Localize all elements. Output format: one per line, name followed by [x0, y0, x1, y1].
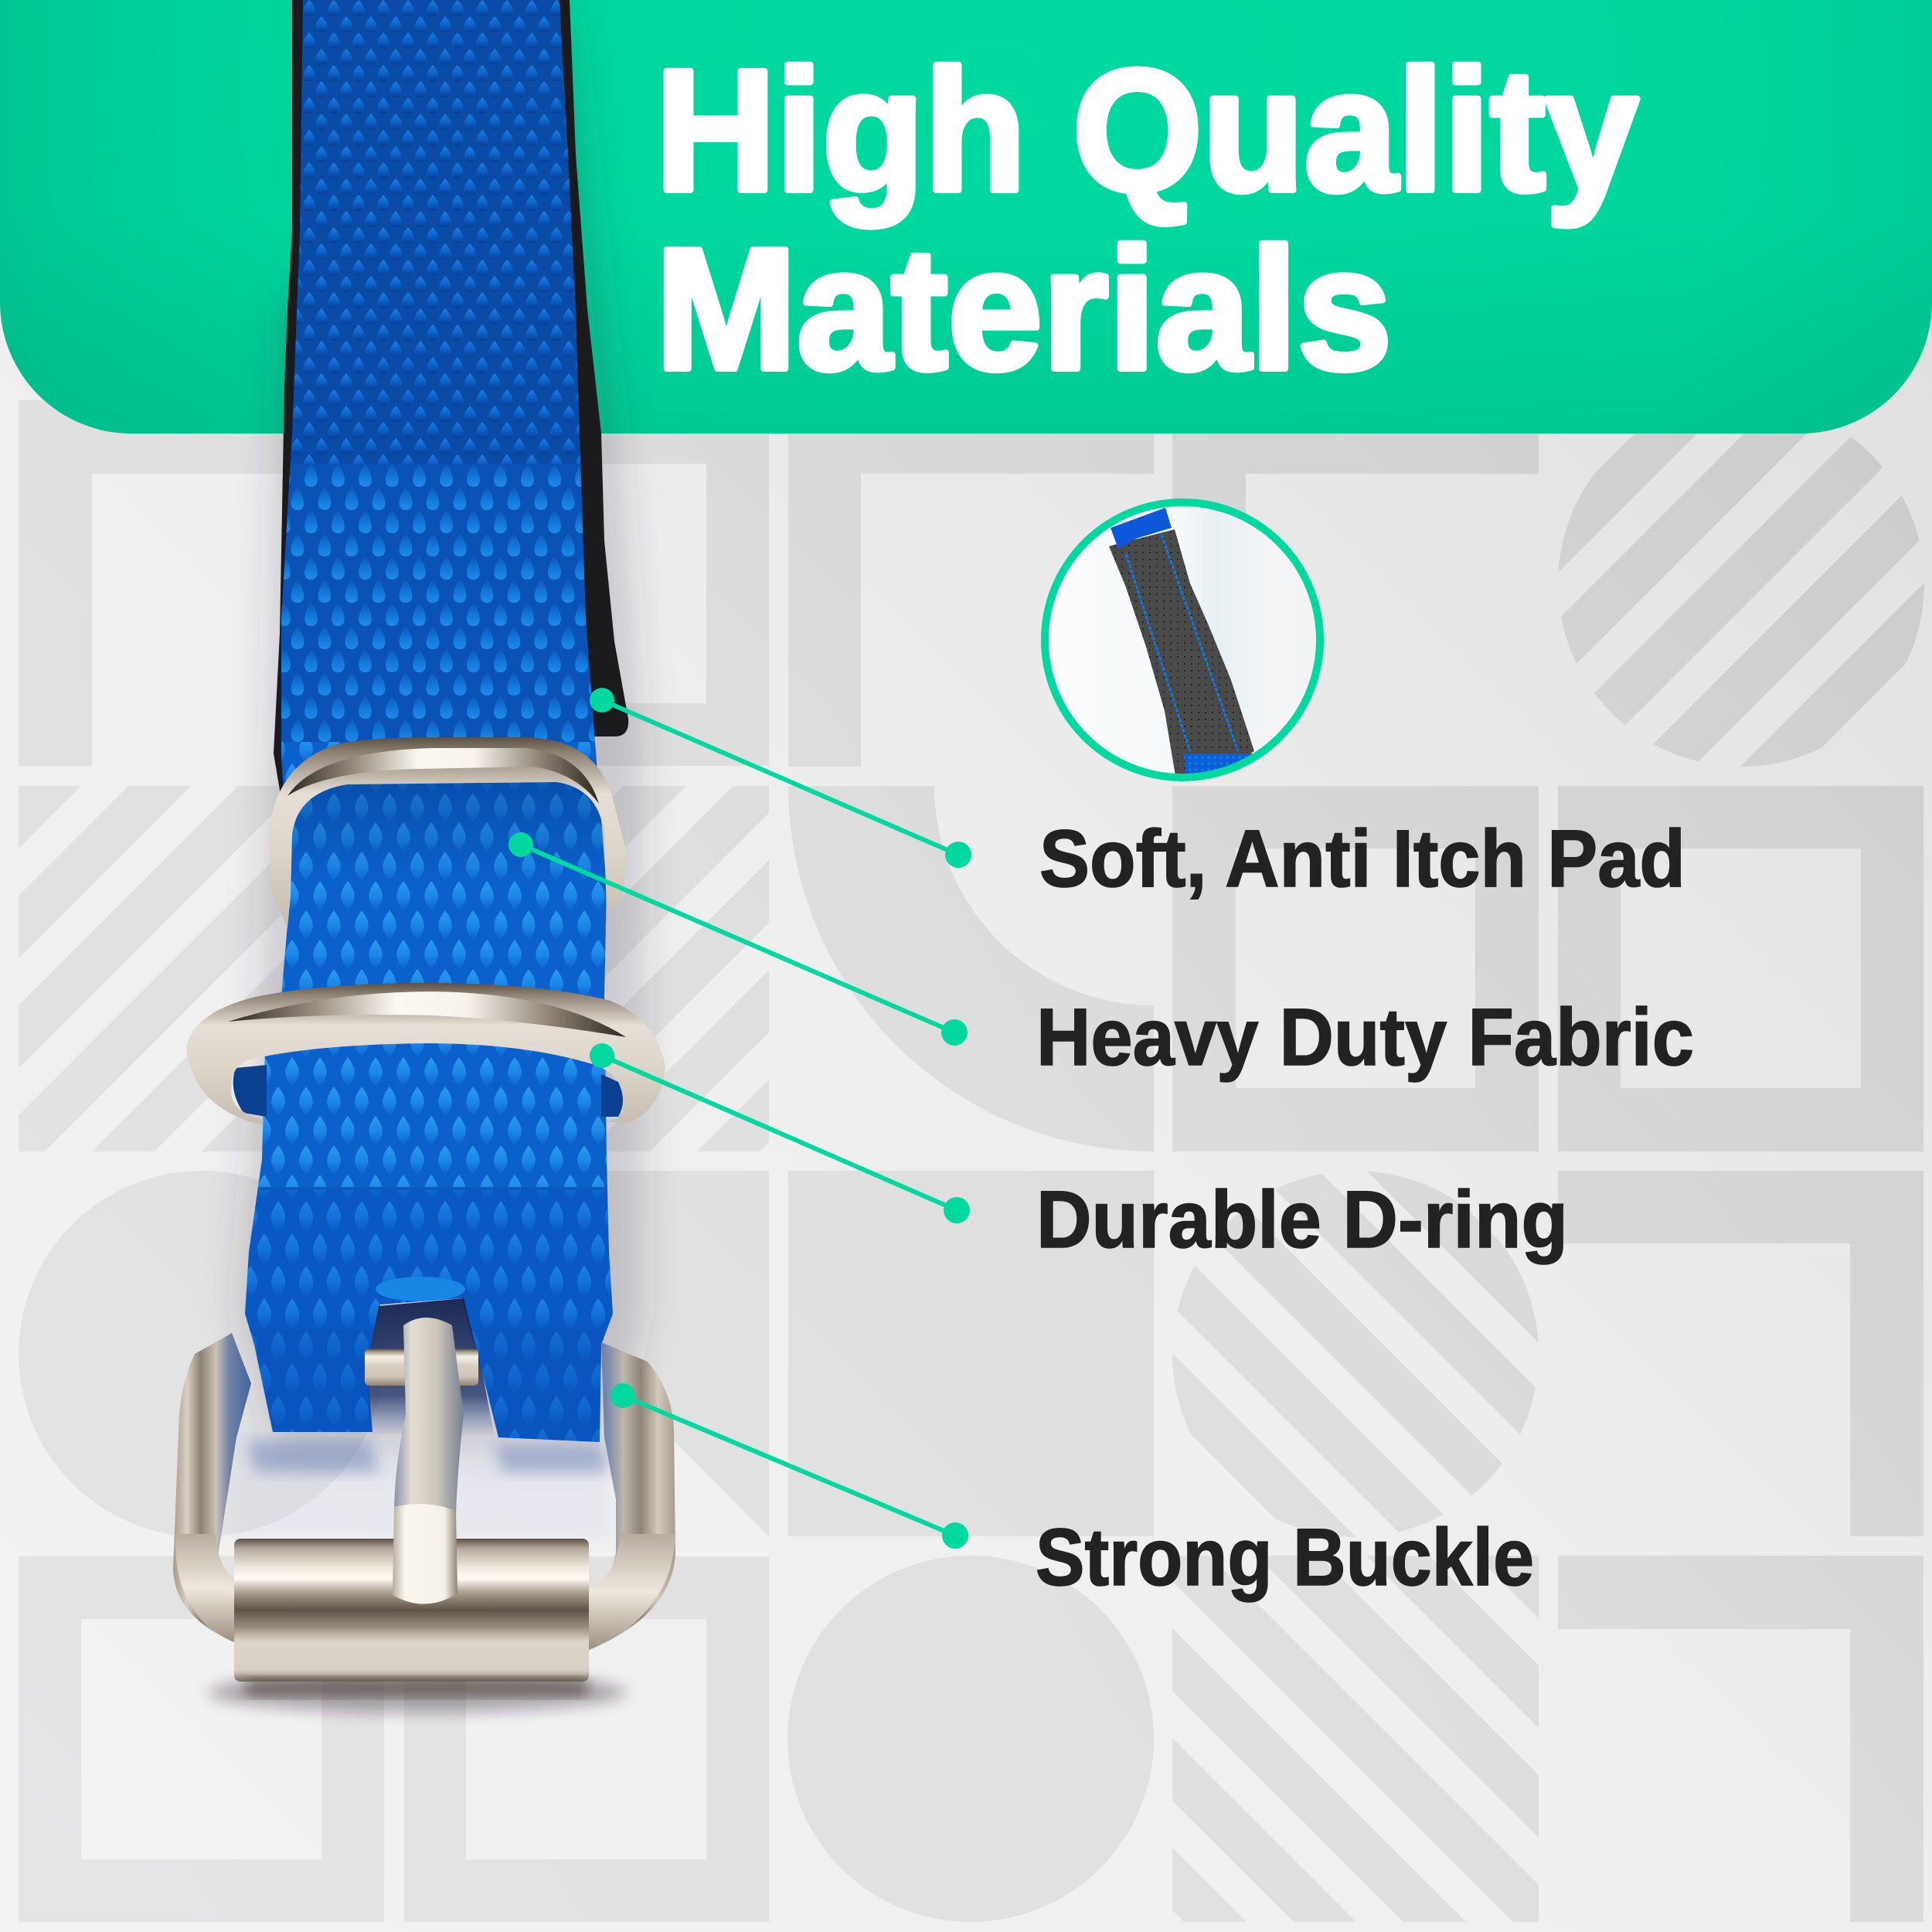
buckle frame: [173, 1318, 675, 1696]
cross bar: [365, 1349, 478, 1386]
callout: D-ring: [590, 1043, 970, 1223]
title: Materials: [655, 213, 1392, 406]
blue strap ends: [1111, 508, 1172, 549]
callout lines and dots: [509, 688, 971, 1549]
background tile pattern: [19, 400, 1924, 1922]
title: [655, 34, 1638, 406]
blue woven strap: [232, 0, 634, 1453]
collar photo illustration: [173, 0, 675, 1696]
green header banner: [0, 0, 1932, 434]
right frame bar: [589, 1342, 675, 1650]
callout: fabric: [509, 832, 968, 1046]
shadow in strap notch: [367, 1298, 495, 1437]
left frame bar: [173, 1333, 251, 1642]
label: D-ring: Durable D-ring: [1036, 1175, 1568, 1265]
drop shadows under collar: [209, 0, 641, 1713]
D-ring inner shadow holes: [233, 1065, 623, 1117]
roller: [234, 1539, 589, 1682]
black padded lining: [274, 0, 628, 804]
label: soft pad: Soft, Anti Itch Pad: [1039, 814, 1685, 904]
D-ring: [186, 983, 665, 1125]
title: High Quality: [655, 34, 1638, 227]
callout: buckle: [611, 1383, 968, 1549]
right bottom corner: [589, 1534, 675, 1650]
inset circle: padded lining close-up: [1045, 502, 1320, 788]
keeper loop: [269, 737, 626, 927]
left bottom corner: [175, 1534, 234, 1642]
label: buckle: Strong Buckle: [1036, 1512, 1534, 1603]
callout: soft pad: [590, 688, 971, 868]
prong tip: [393, 1504, 457, 1604]
label: fabric: Heavy Duty Fabric: [1036, 992, 1694, 1083]
lining strip: [1109, 529, 1254, 781]
prong: [394, 1318, 464, 1515]
labels: [1036, 814, 1694, 1603]
